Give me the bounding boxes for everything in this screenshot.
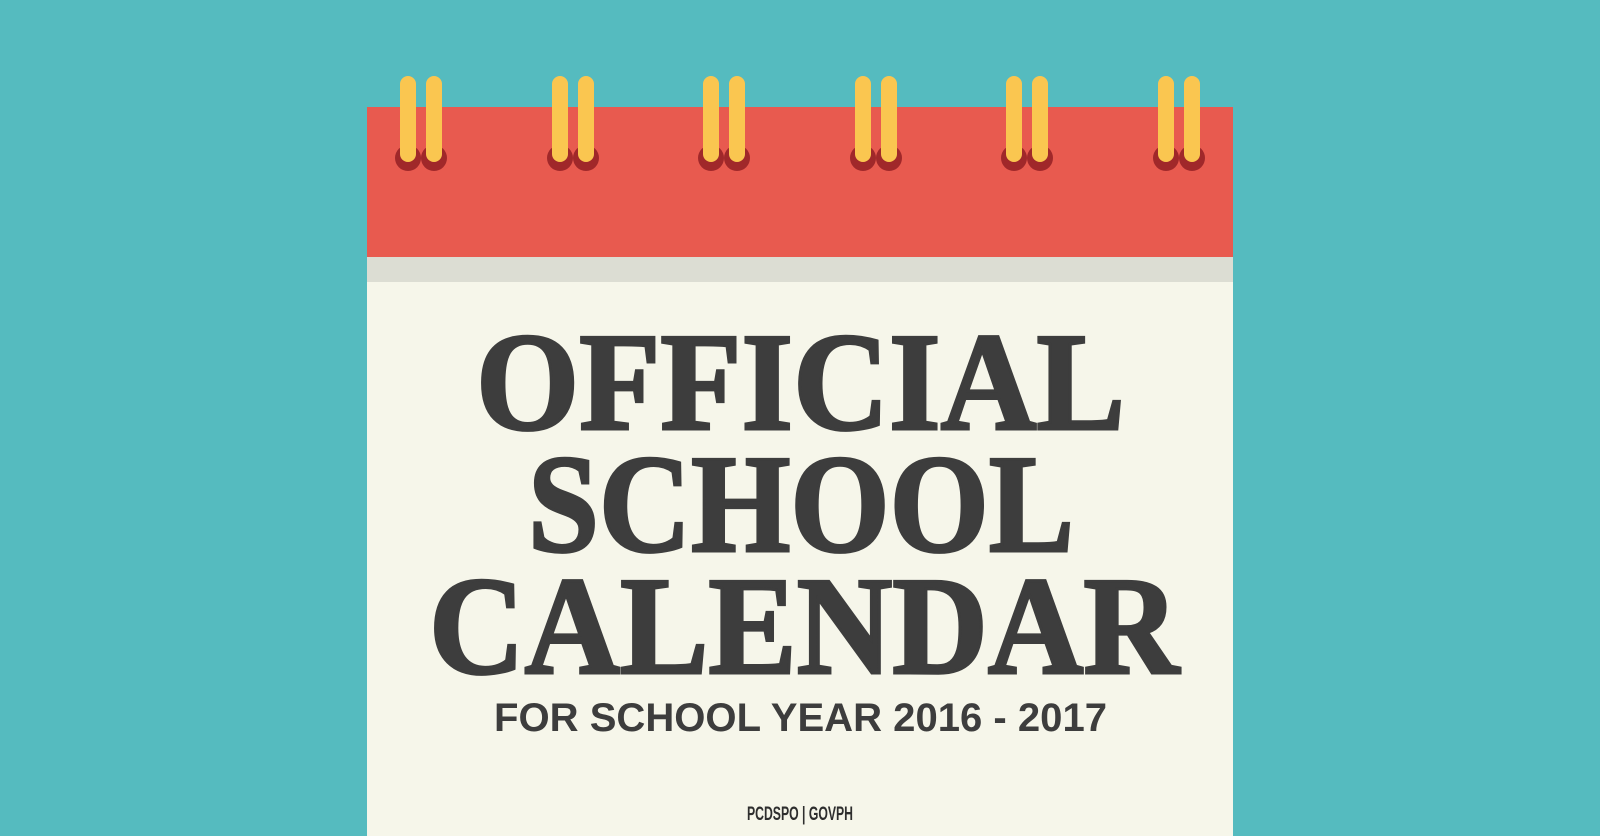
title [429, 305, 1181, 704]
icon: binder rings [395, 76, 1205, 171]
footer credit: PCDSPO | GOVPH [747, 804, 853, 825]
title: OFFICIAL [476, 305, 1125, 460]
title: CALENDAR [429, 549, 1181, 704]
title: SCHOOL [528, 427, 1074, 582]
panel: calendar page [367, 107, 1233, 836]
subtitle: FOR SCHOOL YEAR 2016 - 2017 [494, 696, 1107, 740]
